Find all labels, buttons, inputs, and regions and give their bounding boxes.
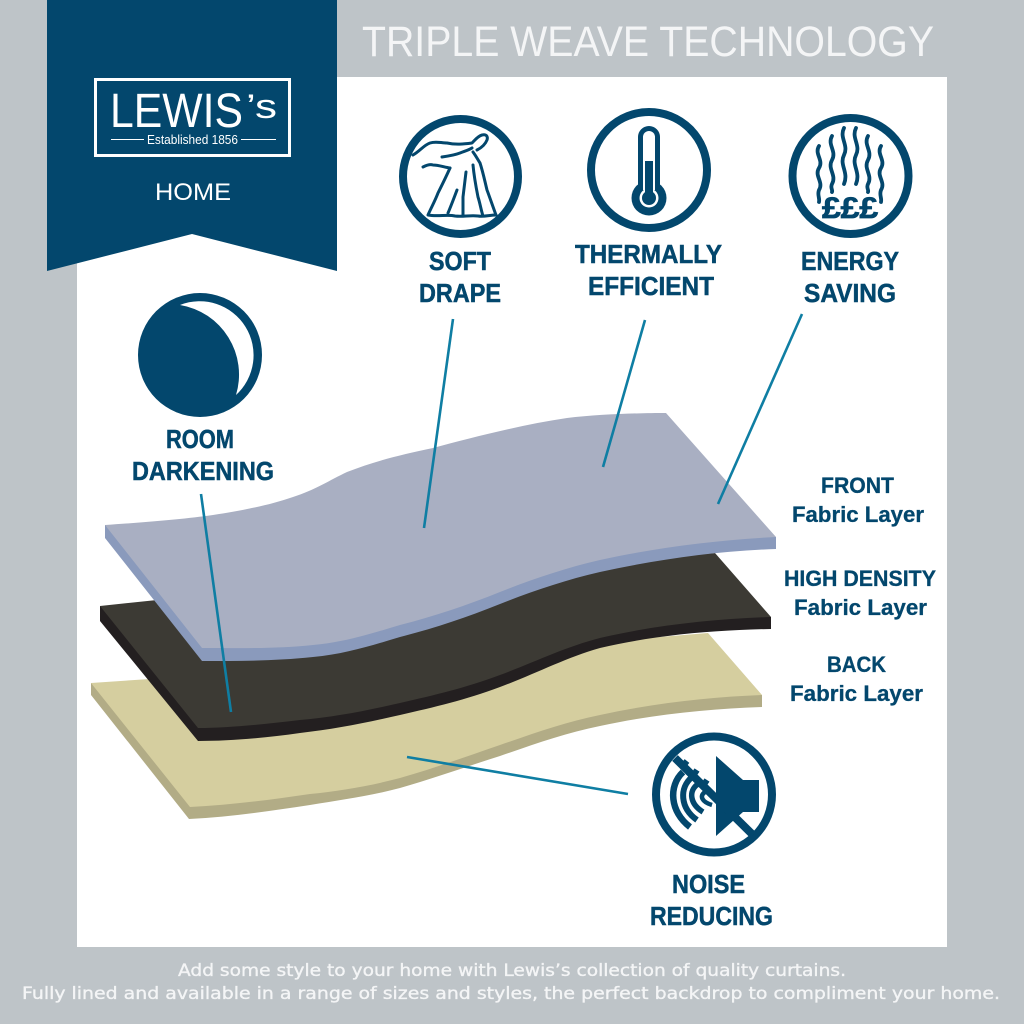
- label: soft drape: DRAPE: [419, 280, 501, 308]
- label: high density fabric layer: HIGH DENSITY: [784, 566, 936, 591]
- logo tagline: Established 1856: [147, 133, 238, 147]
- label: noise reducing: REDUCING: [650, 903, 773, 931]
- label: energy saving: [801, 248, 899, 308]
- pound signs: £££: [822, 192, 878, 225]
- white panel: [77, 77, 947, 947]
- label: high density fabric layer: Fabric Layer: [794, 595, 927, 620]
- label: room darkening: [132, 426, 274, 486]
- icon: energy saving: [792, 118, 908, 234]
- label: front fabric layer: [792, 473, 924, 527]
- label: energy saving: ENERGY: [801, 248, 899, 276]
- label: front fabric layer: Fabric Layer: [792, 502, 924, 527]
- back fabric layer: [91, 633, 762, 819]
- label: soft drape: [419, 248, 501, 308]
- label: back fabric layer: [790, 652, 923, 706]
- prohibition slash: [675, 758, 753, 835]
- brand banner: [47, 0, 337, 271]
- front fabric layer: [105, 413, 776, 661]
- label: high density fabric layer: [784, 566, 936, 620]
- label: back fabric layer: Fabric Layer: [790, 681, 923, 706]
- label: soft drape: SOFT: [429, 248, 491, 276]
- heat waves: [818, 128, 882, 202]
- title: TRIPLE WEAVE TECHNOLOGY: [362, 18, 934, 66]
- logo box: [96, 80, 290, 156]
- home label: HOME: [155, 179, 231, 206]
- label: noise reducing: [650, 871, 773, 931]
- icon: noise reducing: [656, 736, 772, 852]
- icon: soft drape: [403, 119, 518, 234]
- label: thermally efficient: [575, 241, 722, 301]
- footer text: [22, 961, 1000, 1004]
- label: noise reducing: NOISE: [672, 871, 745, 899]
- label: room darkening: DARKENING: [132, 458, 274, 486]
- high density fabric layer: [100, 553, 771, 741]
- footer text: Fully lined and available in a range of sizes and styles, the perfect backdrop to compliment your home.: [22, 984, 1000, 1004]
- leader lines: [201, 314, 802, 794]
- logo wordmark: LEWIS: [110, 85, 243, 138]
- sound waves: [673, 772, 712, 827]
- label: energy saving: SAVING: [804, 280, 896, 308]
- label: front fabric layer: FRONT: [821, 473, 894, 498]
- label: thermally efficient: THERMALLY: [575, 241, 722, 269]
- icon: thermometer: [591, 112, 707, 228]
- layered fabric illustration: [91, 413, 776, 819]
- label: room darkening: ROOM: [166, 426, 234, 454]
- label: thermally efficient: EFFICIENT: [588, 273, 714, 301]
- logo wordmark: ’s: [246, 88, 277, 126]
- label: back fabric layer: BACK: [827, 652, 887, 677]
- speaker: [716, 756, 759, 836]
- footer text: Add some style to your home with Lewis’s collection of quality curtains.: [178, 961, 846, 981]
- icon: room darkening moon: [138, 293, 262, 417]
